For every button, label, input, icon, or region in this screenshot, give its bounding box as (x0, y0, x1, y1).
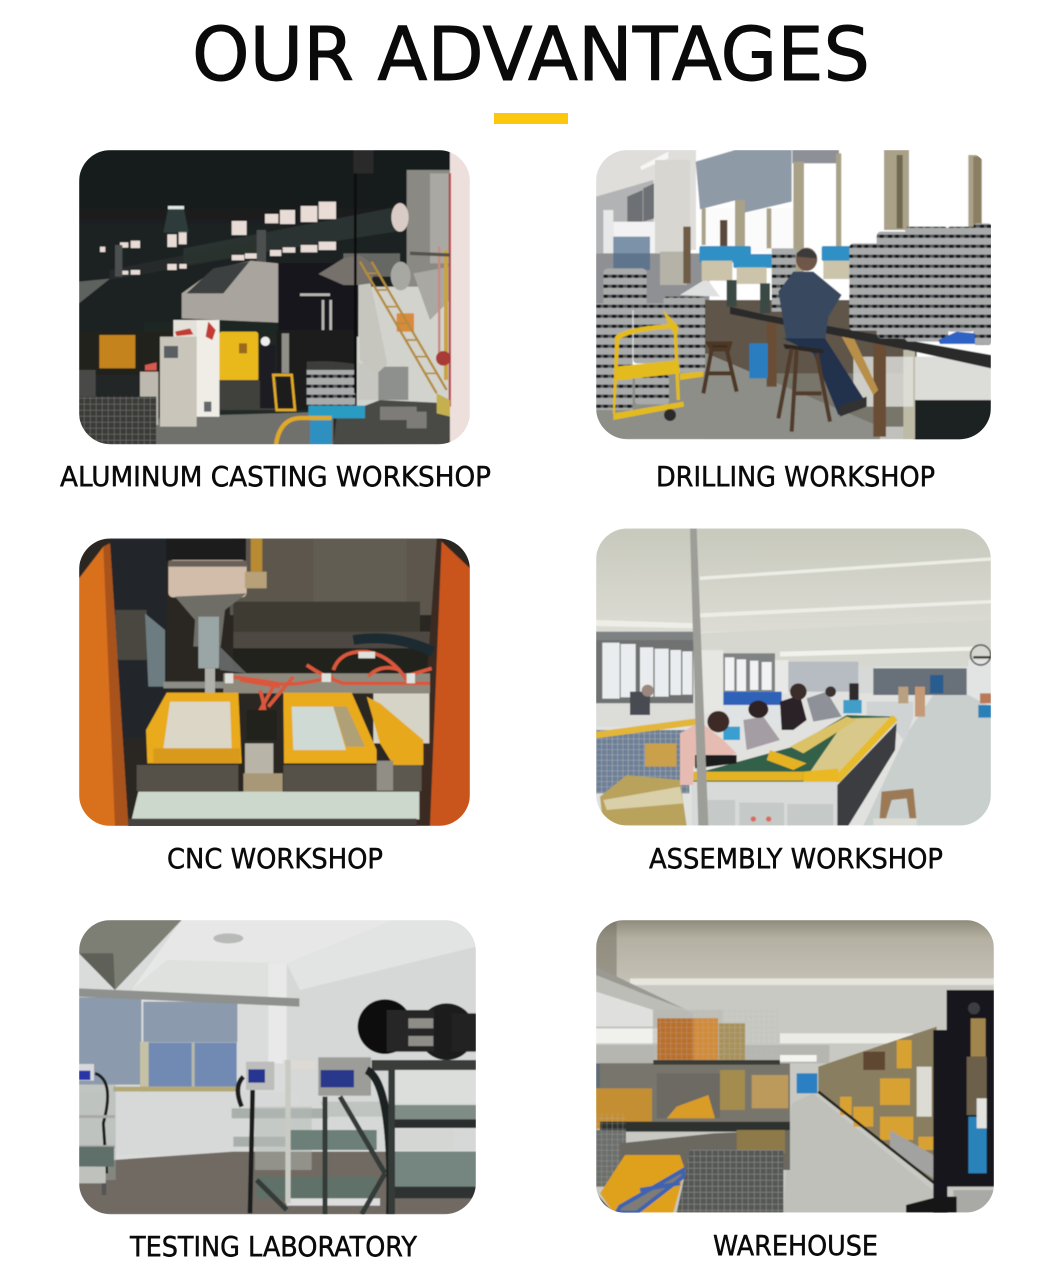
panel: assembly workshop photo (596, 528, 991, 826)
panel: CNC workshop photo (79, 538, 470, 827)
label: drilling workshop: DRILLING WORKSHOP (656, 461, 935, 493)
label: testing laboratory: TESTING LABORATORY (129, 1231, 417, 1263)
label: CNC workshop: CNC WORKSHOP (167, 843, 383, 875)
panel: drilling workshop photo (596, 150, 992, 440)
label: assembly workshop: ASSEMBLY WORKSHOP (649, 843, 943, 875)
title: OUR ADVANTAGES (192, 12, 870, 98)
panel: testing laboratory photo (79, 920, 476, 1214)
panel: aluminum casting workshop photo (79, 150, 470, 445)
label: aluminum casting workshop: ALUMINUM CASTING WORKSHOP (60, 461, 491, 493)
label: warehouse: WAREHOUSE (713, 1230, 878, 1262)
panel: warehouse photo (596, 920, 994, 1213)
title accent bar (494, 113, 568, 124)
